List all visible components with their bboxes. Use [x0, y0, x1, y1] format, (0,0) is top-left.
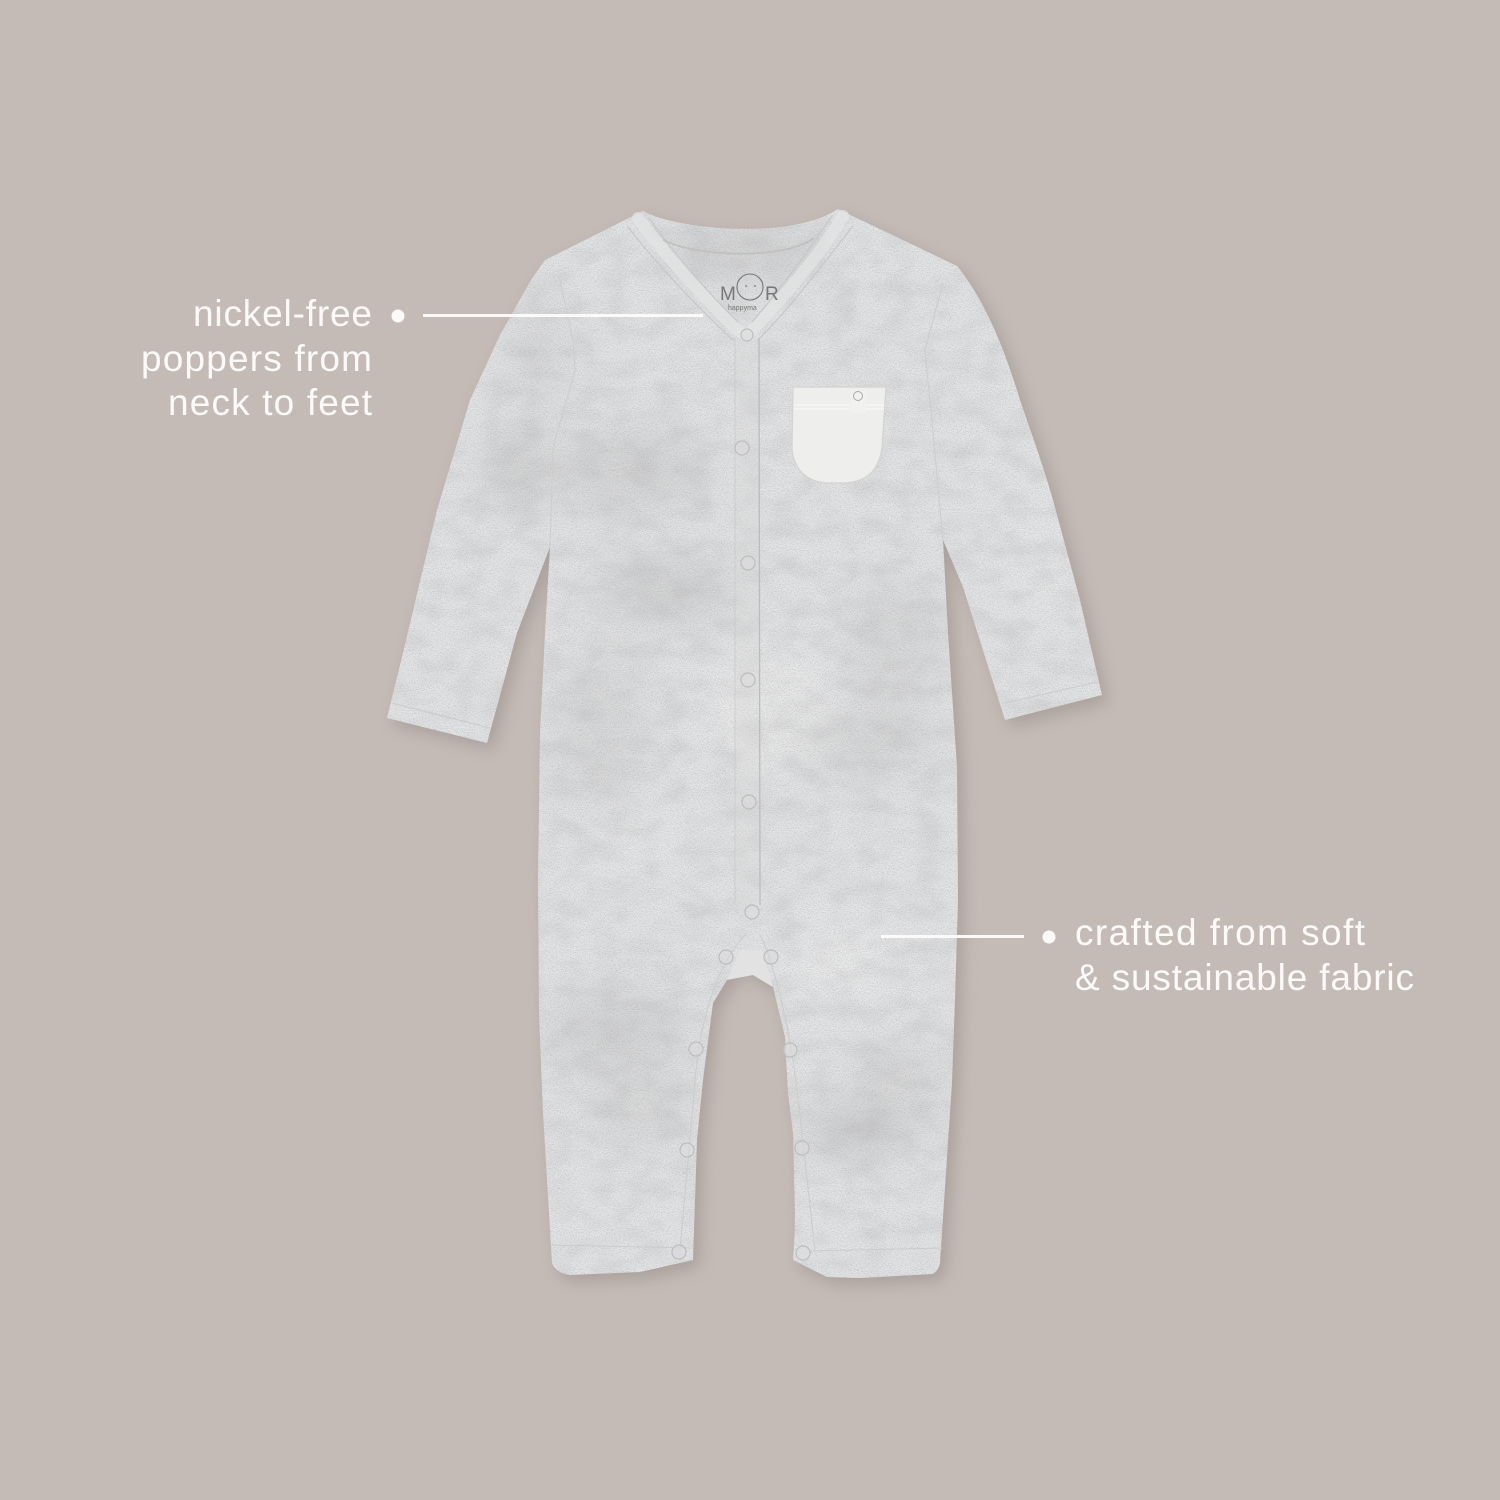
- callout text: poppers: [141, 293, 373, 423]
- callout: soft sustainable fabric: [881, 912, 1414, 998]
- callout leader line: [423, 314, 703, 317]
- callout dot: [1042, 930, 1056, 944]
- chest pocket: [792, 387, 886, 483]
- cuff hems: [392, 703, 490, 728]
- callout text: poppers: poppers from: [141, 338, 372, 379]
- popper snaps: [672, 329, 810, 1260]
- ankle hems: [552, 1245, 690, 1248]
- front placket: [680, 338, 815, 1250]
- armhole seams: [550, 280, 575, 547]
- neckline and V collar band: [392, 216, 1097, 1251]
- callout text: fabric: crafted from soft: [1075, 912, 1366, 953]
- garment fabric body: [370, 190, 1120, 1290]
- garment drop shadow: [393, 216, 1108, 1285]
- pocket tag: [851, 391, 866, 413]
- garment: grey long-sleeved sleepsuit: [370, 190, 1120, 1290]
- crotch gusset: [727, 950, 773, 987]
- callout text: poppers: neck to feet: [168, 382, 373, 423]
- fabric shading patches: [482, 226, 931, 1160]
- callout dot: [392, 310, 404, 322]
- neck label logo: happyma: [728, 305, 757, 312]
- fabric mottling: [396, 226, 1098, 1273]
- callout text: fabric: & sustainable fabric: [1075, 957, 1414, 998]
- callout: nickel-free poppers: [141, 293, 703, 423]
- inner leg plackets: [680, 935, 815, 1250]
- neck label logo: R: [765, 284, 779, 305]
- neck label logo: [720, 274, 779, 312]
- callout text: fabric: [1075, 912, 1414, 998]
- heather texture: [370, 190, 1120, 1290]
- callout text: poppers: nickel-free: [193, 293, 372, 334]
- neck label logo: M: [720, 284, 736, 305]
- callout leader line: [881, 935, 1024, 938]
